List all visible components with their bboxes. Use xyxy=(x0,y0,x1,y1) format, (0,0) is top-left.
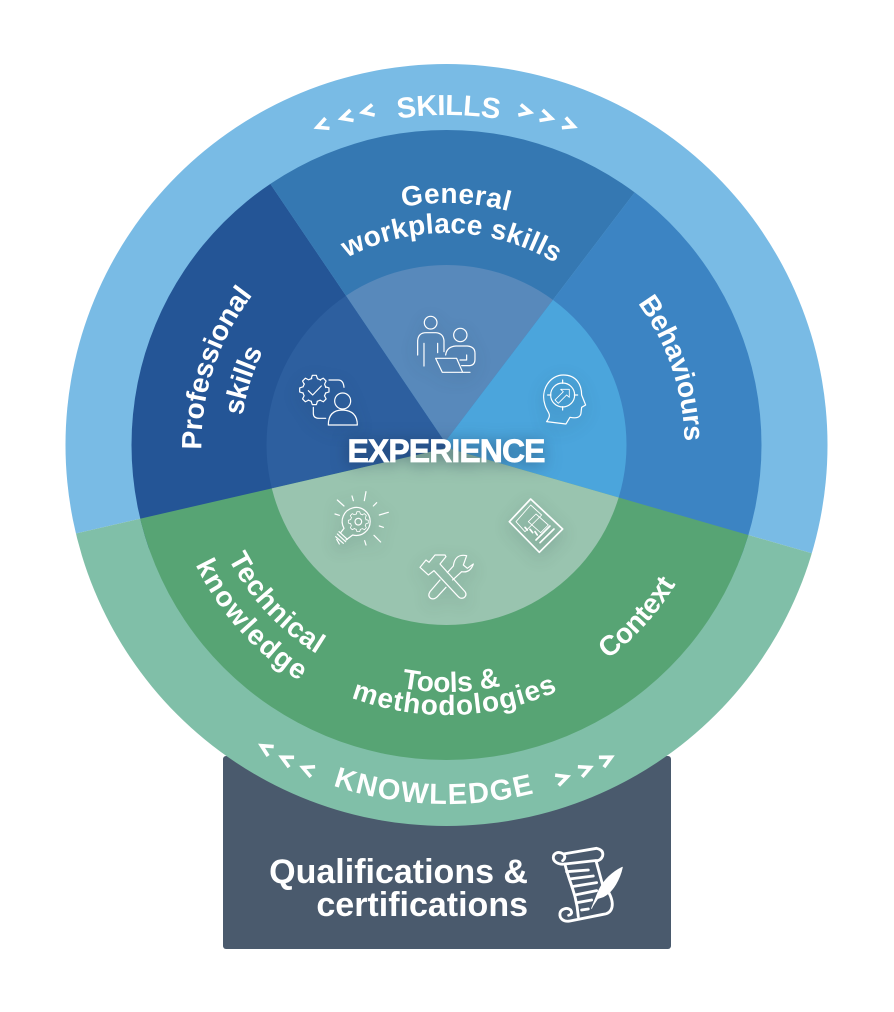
segment: behaviours xyxy=(446,192,762,560)
icon: people with laptop xyxy=(418,316,475,372)
outer ring: skills xyxy=(66,64,828,554)
label: general workplace skills: workplace skills xyxy=(340,213,560,261)
heading: skills with chevrons: SKILLS xyxy=(398,95,500,118)
label: technical knowledge: knowledge xyxy=(196,557,304,678)
icon: scroll and quill xyxy=(553,848,622,921)
label: professional skills: Professional xyxy=(182,284,252,448)
label: behaviours: Behaviours xyxy=(639,294,700,440)
icon: head with compass xyxy=(544,375,586,424)
icon: gear and person xyxy=(300,375,357,425)
icon: light bulb with gear xyxy=(335,492,388,545)
text: qualifications and certifications xyxy=(269,853,528,924)
label: context: Context xyxy=(600,576,676,656)
icon: hammer and wrench xyxy=(420,555,473,599)
center title: experience: EXPERIENCE xyxy=(348,433,546,469)
segment: general workplace skills xyxy=(270,130,634,440)
label: general workplace skills: General xyxy=(402,186,512,210)
label: tools and methodologies: methodologies xyxy=(352,680,556,716)
text: qualifications and certifications: certifications xyxy=(316,886,528,924)
heading: knowledge with chevrons: KNOWLEDGE xyxy=(334,767,533,804)
label: professional skills: skills xyxy=(226,348,261,414)
label: tools and methodologies: Tools & xyxy=(404,668,500,692)
segment: knowledge group xyxy=(140,448,748,760)
icon: document xyxy=(509,499,563,552)
segment: professional skills xyxy=(132,184,446,550)
heading: knowledge with chevrons xyxy=(258,744,615,804)
panel: qualifications and certifications xyxy=(223,756,671,949)
label: technical knowledge: Technical xyxy=(231,549,326,653)
outer ring: knowledge xyxy=(76,518,812,826)
label: general workplace skills xyxy=(340,186,560,261)
text: qualifications and certifications: Qualifications & xyxy=(269,853,528,891)
heading: skills with chevrons xyxy=(314,95,578,130)
